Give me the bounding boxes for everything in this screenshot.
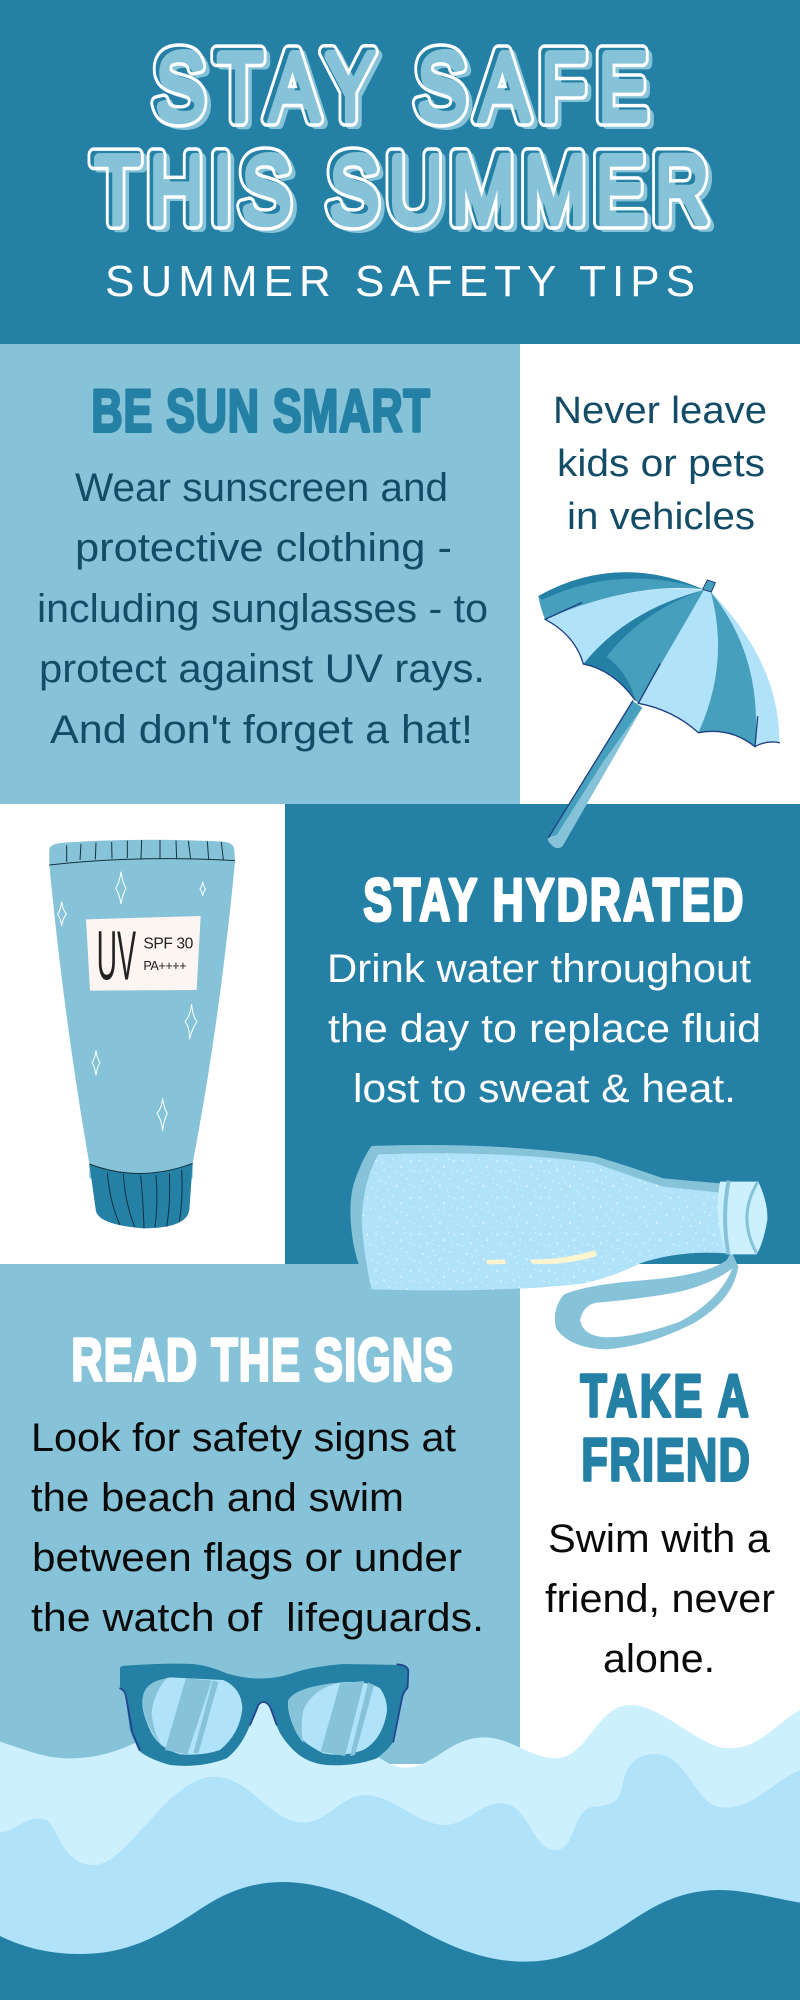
umbrella pale centre panel [638, 590, 718, 733]
bottle highlights [486, 1250, 597, 1264]
tube cap [89, 1163, 193, 1228]
heading: stay hydrated: STAY HYDRATED [363, 868, 743, 934]
right lens [288, 1681, 387, 1756]
umbrella mid panel [607, 590, 704, 703]
text: stay hydrated body [327, 947, 761, 1111]
icon: sunscreen tube [49, 840, 235, 1228]
text: never leave kids or pets: in vehicles [567, 496, 755, 538]
bottle strap [555, 1252, 738, 1349]
tube label [86, 916, 201, 994]
umbrella pole [548, 701, 642, 848]
text: take a friend body [545, 1517, 775, 1681]
tube label: UV [97, 916, 136, 994]
text: take a friend body: Swim with a [548, 1517, 771, 1561]
heading: read the signs: READ THE SIGNS [71, 1328, 453, 1394]
text: be sun smart body: protective clothing - [75, 526, 452, 570]
text: be sun smart body [37, 466, 488, 752]
umbrella rim lines [545, 603, 779, 747]
umbrella dark top strip [538, 572, 703, 600]
text: be sun smart body: And don't forget a hat! [50, 708, 473, 752]
tube body [49, 840, 235, 1178]
text: read the signs body [31, 1416, 484, 1640]
umbrella dark panel [583, 590, 704, 703]
panel: header band [0, 0, 800, 344]
text: never leave kids or pets: kids or pets [557, 443, 765, 485]
icon: sunglasses [120, 1664, 409, 1766]
text: take a friend body: friend, never [545, 1577, 775, 1621]
text: never leave kids or pets: Never leave [553, 390, 767, 432]
text: read the signs body: Look for safety signs at [31, 1416, 456, 1460]
tube crimp ribs [49, 840, 235, 865]
text: read the signs body: the beach and swim [31, 1476, 404, 1520]
heading: be sun smart: BE SUN SMART [91, 379, 430, 445]
text: stay hydrated body: the day to replace fluid [328, 1007, 761, 1051]
text: stay hydrated body: Drink water throughout [327, 947, 751, 991]
text: be sun smart body: Wear sunscreen and [75, 466, 448, 510]
panel: white tube background [0, 804, 285, 1264]
bottle speckles [362, 1153, 727, 1290]
sunglasses frame [120, 1664, 409, 1766]
wave: pale top layer [0, 1700, 800, 2000]
tube label: SPF 30 [143, 935, 194, 952]
wave: dark bottom layer [0, 1882, 800, 2000]
umbrella mid right panel [698, 592, 756, 747]
umbrella tip [703, 580, 715, 592]
text: read the signs body: between flags or under [32, 1536, 462, 1580]
heading: take a friend: TAKE A [580, 1364, 749, 1430]
heading: take a friend [580, 1364, 750, 1494]
heading: take a friend: FRIEND [581, 1428, 750, 1494]
tube label: PA++++ [143, 959, 187, 973]
text: take a friend body: alone. [603, 1637, 715, 1681]
bottle cap [718, 1181, 767, 1254]
text: be sun smart body: including sunglasses - to [37, 587, 488, 631]
umbrella top left panel [538, 572, 703, 619]
sunglasses outline accents [120, 1664, 408, 1750]
panel: be sun smart [0, 344, 520, 804]
subtitle: SUMMER SAFETY TIPS [105, 257, 695, 306]
title [88, 43, 714, 233]
bottle shell [350, 1145, 727, 1290]
icon: beach umbrella [538, 572, 779, 848]
text: read the signs body: the watch of lifeguards. [31, 1596, 484, 1640]
text: be sun smart body: protect against UV rays. [39, 647, 485, 691]
panel: white vehicle tip [520, 344, 800, 804]
tube cap ribs [89, 1163, 193, 1228]
title white outline [88, 43, 711, 231]
text: never leave kids or pets [553, 390, 767, 538]
text: stay hydrated body: lost to sweat & heat. [353, 1067, 736, 1111]
panel: stay hydrated [285, 804, 800, 1264]
waves [0, 1700, 800, 2000]
left lens [142, 1677, 242, 1755]
panel: take a friend [520, 1264, 800, 1764]
tube sparkles [58, 872, 206, 1131]
umbrella pale edge panel [711, 592, 779, 747]
umbrella pale panel [545, 588, 704, 664]
title shadow fill: THIS SUMMER [97, 138, 713, 247]
title shadow fill [97, 35, 713, 247]
panel: read the signs [0, 1264, 520, 1764]
icon: water bottle [350, 1145, 767, 1349]
bottle water [362, 1153, 727, 1290]
wave: mid layer [0, 1754, 800, 2000]
title shadow fill: STAY SAFE [158, 35, 652, 144]
